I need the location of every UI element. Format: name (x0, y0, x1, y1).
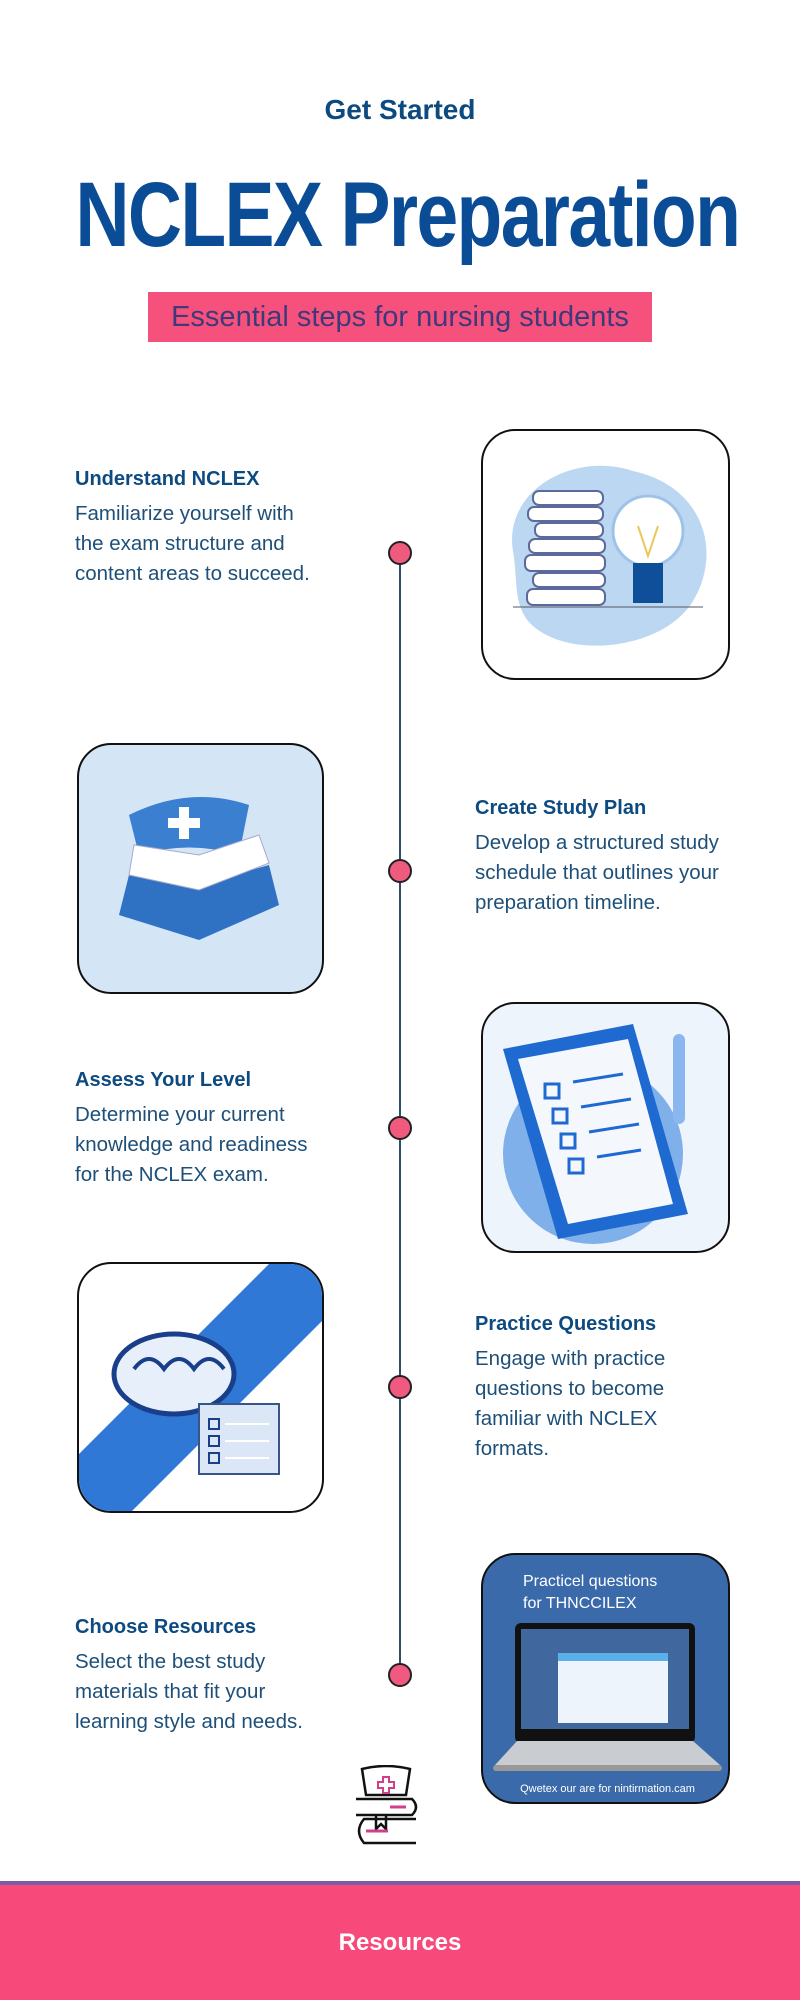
step 4 text: Practice Questions: familiar with NCLEX (475, 1407, 657, 1430)
footer: Resources: Resources (339, 1929, 461, 1956)
timeline line (399, 553, 401, 1675)
step 3 text: Assess Your Level: Assess Your Level (75, 1069, 251, 1091)
step 4 text: Practice Questions: formats. (475, 1437, 549, 1460)
tagline banner (148, 292, 652, 342)
step 4 text: Practice Questions (475, 1313, 665, 1460)
step 5 text: Choose Resources: Select the best study (75, 1650, 265, 1673)
step 4 text: Practice Questions: Engage with practice (475, 1347, 665, 1370)
step 3 text: Assess Your Level: for the NCLEX exam. (75, 1163, 269, 1186)
step 2 text: Create Study Plan (475, 797, 719, 914)
tagline banner: Essential steps for nursing students (171, 301, 629, 333)
step 2 text: Create Study Plan: schedule that outlines your (475, 861, 719, 884)
step 3 text: Assess Your Level: Determine your current (75, 1103, 285, 1126)
step 1 text: Understand NCLEX: the exam structure and (75, 532, 285, 555)
step 1 text: Understand NCLEX: content areas to succeed. (75, 562, 310, 585)
image 4: brain assessment (77, 1262, 324, 1513)
image 5: laptop practice questions: for THNCCILEX (523, 1595, 637, 1612)
title: NCLEX Preparation (75, 164, 739, 266)
image 2: nurse cap and open book (77, 743, 324, 994)
image 5: laptop practice questions (481, 1553, 730, 1804)
step 3 text: Assess Your Level: knowledge and readiness (75, 1133, 308, 1156)
image 5: laptop practice questions: Qwetex our are for nintirmation.cam (520, 1783, 695, 1795)
step 2 text: Create Study Plan: Develop a structured study (475, 831, 719, 854)
step 1 text: Understand NCLEX (75, 468, 310, 585)
image 3: checklist clipboard (481, 1002, 730, 1253)
step 1 text: Understand NCLEX: Understand NCLEX (75, 468, 259, 490)
step 4 text: Practice Questions: questions to become (475, 1377, 664, 1400)
step 5 text: Choose Resources: materials that fit your (75, 1680, 265, 1703)
step 5 text: Choose Resources: Choose Resources (75, 1616, 256, 1638)
image 5: laptop practice questions: Practicel questions (523, 1573, 657, 1590)
step 4 text: Practice Questions: Practice Questions (475, 1313, 656, 1335)
step 5 text: Choose Resources (75, 1616, 303, 1733)
subtitle: Get Started: Get Started (325, 94, 475, 125)
step 2 text: Create Study Plan: preparation timeline. (475, 891, 661, 914)
step 3 text: Assess Your Level (75, 1069, 308, 1186)
step 2 text: Create Study Plan: Create Study Plan (475, 797, 646, 819)
step 5 text: Choose Resources: learning style and needs. (75, 1710, 303, 1733)
step 1 text: Understand NCLEX: Familiarize yourself with (75, 502, 294, 525)
icon: nurse cap on books (356, 1765, 418, 1844)
image 1: books and lightbulb (481, 429, 730, 680)
footer: Resources (0, 1881, 800, 2000)
